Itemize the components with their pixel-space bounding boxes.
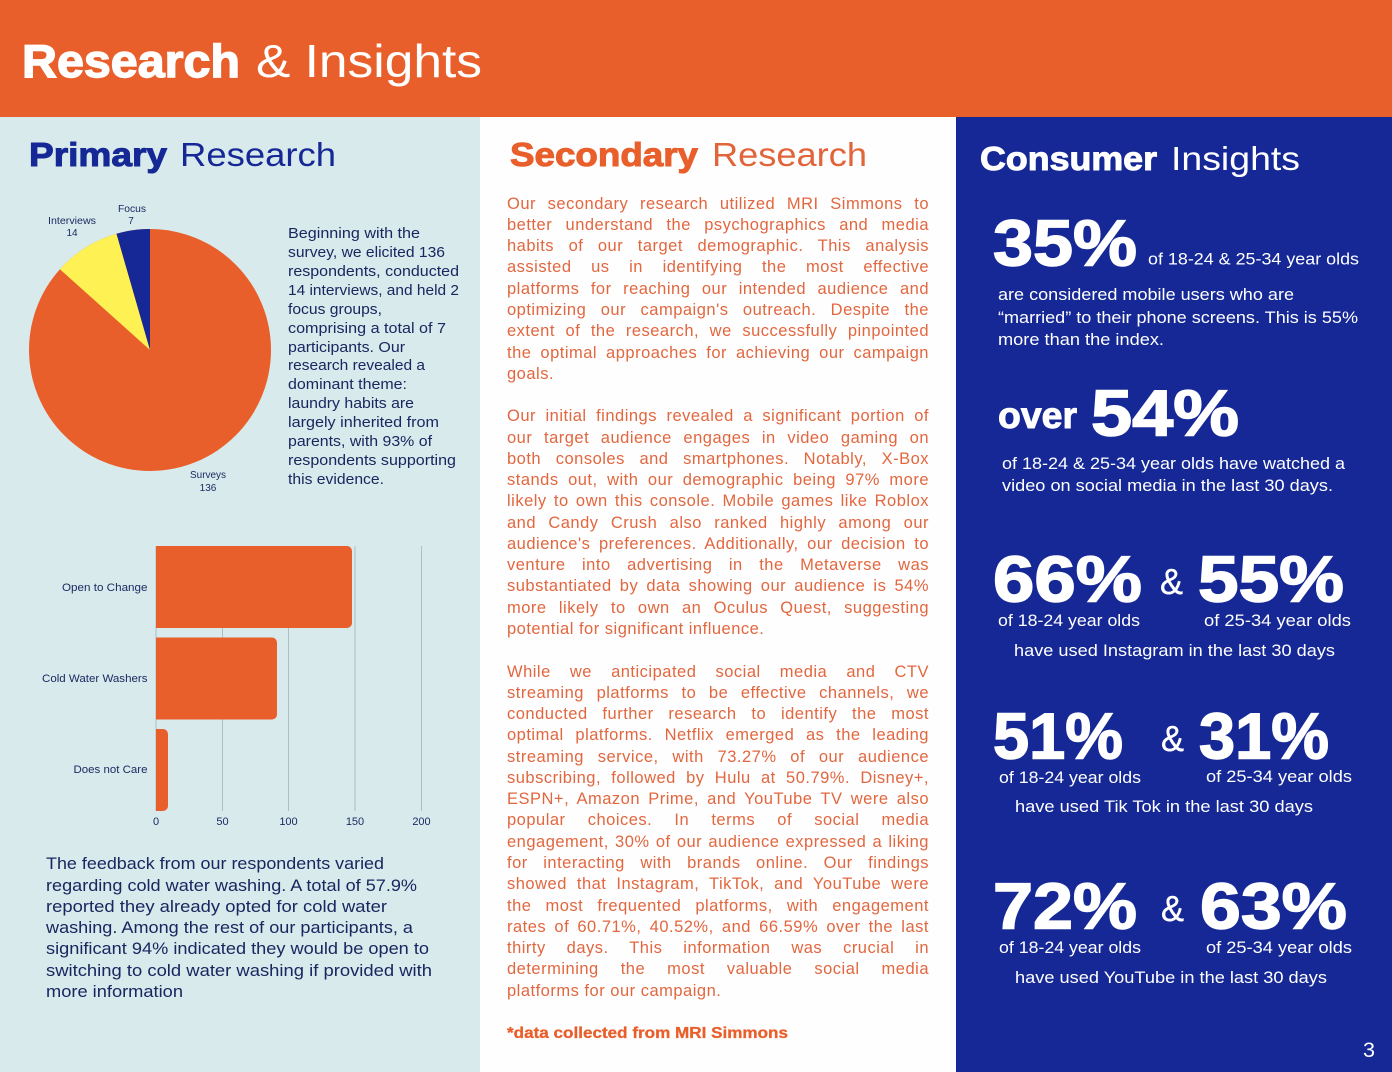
text block: primary research summary: parents, with 93% of xyxy=(288,433,433,450)
text block: primary research summary: dominant theme: xyxy=(288,376,407,393)
text block: primary research summary: laundry habits are xyxy=(288,395,414,412)
bar chart: attitudes to cold water washing: 0 xyxy=(153,816,159,828)
text block: streaming and social platforms: thirty days. This information was crucial in xyxy=(507,939,929,957)
text block: streaming and social platforms: While we anticipated social media and CTV xyxy=(507,663,929,681)
text block: MRI Simmons method: extent of the research, we successfully pinpointed xyxy=(507,322,929,340)
bar chart: attitudes to cold water washing: 100 xyxy=(279,816,298,828)
heading: Primary Research: Primary xyxy=(29,137,167,174)
text block: streaming and social platforms: popular choices. In terms of social media xyxy=(507,811,929,829)
text block: cold water feedback: reported they already opted for cold water xyxy=(46,897,387,916)
bar chart: attitudes to cold water washing: 150 xyxy=(346,816,364,828)
pie chart: research methods: Focus xyxy=(118,204,146,215)
text block: cold water feedback xyxy=(45,854,432,1001)
text block: streaming and social platforms: optimal platforms. Netflix emerged as the leading xyxy=(507,726,929,744)
text block: video gaming findings: audience's preferences. Additionally, our decision to xyxy=(507,535,929,553)
stat: Tik Tok 51% and 31% xyxy=(993,700,1352,816)
text block: video gaming findings: both consoles and smartphones. Notably, X-Box xyxy=(507,450,929,468)
panel: secondary research xyxy=(480,117,956,1072)
text block: video gaming findings: more likely to own an Oculus Quest, suggesting xyxy=(507,599,929,617)
text block: MRI Simmons method xyxy=(507,195,929,383)
title: Research & Insights: Research xyxy=(22,35,240,87)
stat: YouTube 72% and 63%: 72% xyxy=(993,870,1137,942)
bar chart: attitudes to cold water washing xyxy=(42,546,431,828)
page number: 3 xyxy=(1363,1039,1375,1062)
bar chart: attitudes to cold water washing: 50 xyxy=(216,816,229,828)
text block: video gaming findings: venture into advertising in the Metaverse was xyxy=(507,556,929,574)
stat: Tik Tok 51% and 31%: & xyxy=(1161,718,1184,759)
text block: primary research summary xyxy=(288,225,459,488)
stat: 35% mobile users: more than the index. xyxy=(998,331,1164,349)
text block: primary research summary: this evidence. xyxy=(288,471,384,488)
text block: cold water feedback: more information xyxy=(46,982,183,1001)
panel: primary research xyxy=(0,117,480,1072)
pie chart: research methods xyxy=(29,204,271,494)
text block: streaming and social platforms: rates of 60.71%, 40.52%, and 66.59% over the last xyxy=(507,918,929,936)
stat: Tik Tok 51% and 31%: of 25-34 year olds xyxy=(1206,768,1352,786)
text block: MRI Simmons method: Our secondary research utilized MRI Simmons to xyxy=(507,195,929,213)
pie chart: research methods: 7 xyxy=(128,216,134,227)
text block: video gaming findings: likely to own this console. Mobile games like Roblox xyxy=(507,492,929,510)
text block: streaming and social platforms: for interacting with brands online. Our findings xyxy=(507,854,929,872)
heading: Secondary Research: Research xyxy=(712,137,867,174)
text block: cold water feedback: significant 94% indicated they would be open to xyxy=(46,939,429,958)
text block: streaming and social platforms: ESPN+, Amazon Prime, and YouTube TV were also xyxy=(507,790,929,808)
stat: 35% mobile users: 35% xyxy=(993,206,1137,280)
text block: video gaming findings xyxy=(507,407,929,638)
stat: over 54% watched video: of 18-24 & 25-34 year olds have watched a xyxy=(1002,455,1346,473)
stat: Tik Tok 51% and 31%: 51% xyxy=(993,700,1123,772)
stat: Tik Tok 51% and 31%: have used Tik Tok in the last 30 days xyxy=(1015,798,1313,816)
text block: MRI Simmons method: goals. xyxy=(507,365,554,383)
stat: Instagram 66% and 55% xyxy=(993,542,1351,660)
pie chart: research methods: Surveys xyxy=(190,470,226,481)
text block: primary research summary: Beginning with the xyxy=(288,225,420,242)
stat: 35% mobile users: of 18-24 & 25-34 year olds xyxy=(1148,250,1359,268)
text block: video gaming findings: and Candy Crush also ranked highly among our xyxy=(507,514,929,532)
stat: YouTube 72% and 63%: of 25-34 year olds xyxy=(1206,939,1352,957)
text block: MRI Simmons method: better understand the psychographics and media xyxy=(507,216,929,234)
text block: MRI Simmons method: habits of our target demographic. This analysis xyxy=(507,237,929,255)
text block: primary research summary: research revealed a xyxy=(288,357,426,374)
text block: primary research summary: largely inherited from xyxy=(288,414,439,431)
stat: Instagram 66% and 55%: 66% xyxy=(993,542,1142,616)
text block: primary research summary: focus groups, xyxy=(288,301,382,318)
stat: Instagram 66% and 55%: of 18-24 year olds xyxy=(998,612,1140,630)
text block: MRI Simmons method: optimizing our campaign's outreach. Despite the xyxy=(507,301,929,319)
text block: streaming and social platforms: streaming platforms to be effective channels, we xyxy=(507,684,929,702)
stat: YouTube 72% and 63%: have used YouTube in the last 30 days xyxy=(1015,969,1327,987)
stat: over 54% watched video: video on social media in the last 30 days. xyxy=(1002,477,1333,495)
stat: over 54% watched video: 54% xyxy=(1091,376,1239,450)
stat: over 54% watched video xyxy=(998,376,1346,495)
text block: video gaming findings: Our initial findings revealed a significant portion of xyxy=(507,407,929,425)
stat: Tik Tok 51% and 31%: 31% xyxy=(1199,700,1329,772)
text block: MRI Simmons method: the optimal approaches for achieving our campaign xyxy=(507,344,929,362)
text block: streaming and social platforms: showed that Instagram, TikTok, and YouTube were xyxy=(507,875,929,893)
stat: Tik Tok 51% and 31%: of 18-24 year olds xyxy=(999,769,1141,787)
text block: streaming and social platforms: streaming service, with 73.27% of our audience xyxy=(507,748,929,766)
stat: Instagram 66% and 55%: 55% xyxy=(1198,542,1344,616)
text block: cold water feedback: washing. Among the rest of our participants, a xyxy=(45,918,414,937)
text block: streaming and social platforms: platforms for our campaign. xyxy=(507,982,721,1000)
text block: primary research summary: respondents supporting xyxy=(288,452,456,469)
pie chart: research methods: 136 xyxy=(200,483,217,494)
stat: YouTube 72% and 63%: of 18-24 year olds xyxy=(999,939,1141,957)
panel: consumer insights xyxy=(956,117,1392,1072)
text block: primary research summary: participants. Our xyxy=(288,339,405,356)
heading: Secondary Research: Secondary xyxy=(510,137,698,174)
stat: YouTube 72% and 63%: & xyxy=(1161,888,1184,929)
title: Research & Insights xyxy=(22,35,482,87)
stat: YouTube 72% and 63% xyxy=(993,870,1352,987)
text block: streaming and social platforms: engagement, 30% of our audience expressed a liking xyxy=(507,833,929,851)
stat: 35% mobile users: “married” to their phone screens. This is 55% xyxy=(998,309,1358,327)
stat: Instagram 66% and 55%: of 25-34 year olds xyxy=(1204,612,1351,630)
heading: Consumer Insights xyxy=(980,141,1300,178)
stat: YouTube 72% and 63%: 63% xyxy=(1200,870,1347,942)
text block: cold water feedback: regarding cold water washing. A total of 57.9% xyxy=(46,876,417,895)
text block: video gaming findings: our target audience engages in video gaming on xyxy=(507,429,929,447)
stat: over 54% watched video: over xyxy=(998,395,1077,436)
text block: primary research summary: 14 interviews, and held 2 xyxy=(288,282,459,299)
bar chart: attitudes to cold water washing: Cold Water Washers xyxy=(42,673,148,685)
heading: Secondary Research xyxy=(510,137,867,174)
stat: Instagram 66% and 55%: & xyxy=(1160,561,1183,602)
text block: streaming and social platforms: conducted further research to identify the most xyxy=(507,705,929,723)
heading: Primary Research: Research xyxy=(180,137,336,174)
stat: 35% mobile users xyxy=(993,206,1359,349)
text block: video gaming findings: stands out, with our demographic being 97% more xyxy=(507,471,929,489)
text block: cold water feedback: switching to cold water washing if provided with xyxy=(46,961,432,980)
text block: primary research summary: survey, we elicited 136 xyxy=(288,244,445,261)
text block: primary research summary: respondents, conducted xyxy=(288,263,459,280)
stat: 35% mobile users: are considered mobile users who are xyxy=(998,286,1294,304)
text block: streaming and social platforms: determining the most valuable social media xyxy=(507,960,929,978)
title: Research & Insights: & Insights xyxy=(256,35,482,87)
bar chart: attitudes to cold water washing: Does not Care xyxy=(74,764,148,776)
pie chart: research methods: 14 xyxy=(66,228,78,239)
text block: video gaming findings: substantiated by data showing our audience is 54% xyxy=(507,577,929,595)
text block: video gaming findings: potential for significant influence. xyxy=(507,620,764,638)
text block: MRI Simmons method: platforms for reaching our intended audience and xyxy=(507,280,929,298)
text block: streaming and social platforms xyxy=(507,663,929,1000)
bar chart: attitudes to cold water washing: 200 xyxy=(412,816,431,828)
heading: Primary Research xyxy=(29,137,336,174)
text block: MRI Simmons method: assisted us in identifying the most effective xyxy=(507,258,929,276)
stat: Instagram 66% and 55%: have used Instagram in the last 30 days xyxy=(1014,642,1335,660)
text block: streaming and social platforms: the most frequented platforms, with engagement xyxy=(507,897,929,915)
text block: primary research summary: comprising a total of 7 xyxy=(288,320,446,337)
panel: header banner xyxy=(0,0,1392,117)
text block: streaming and social platforms: subscribing, followed by Hulu at 50.79%. Disney+, xyxy=(507,769,929,787)
footnote: data source: *data collected from MRI Simmons xyxy=(507,1025,788,1042)
heading: Consumer Insights: Insights xyxy=(1171,141,1300,178)
pie chart: research methods: Interviews xyxy=(48,216,96,227)
bar chart: attitudes to cold water washing: Open to Change xyxy=(62,582,148,594)
text block: cold water feedback: The feedback from our respondents varied xyxy=(46,854,384,873)
heading: Consumer Insights: Consumer xyxy=(980,141,1157,178)
